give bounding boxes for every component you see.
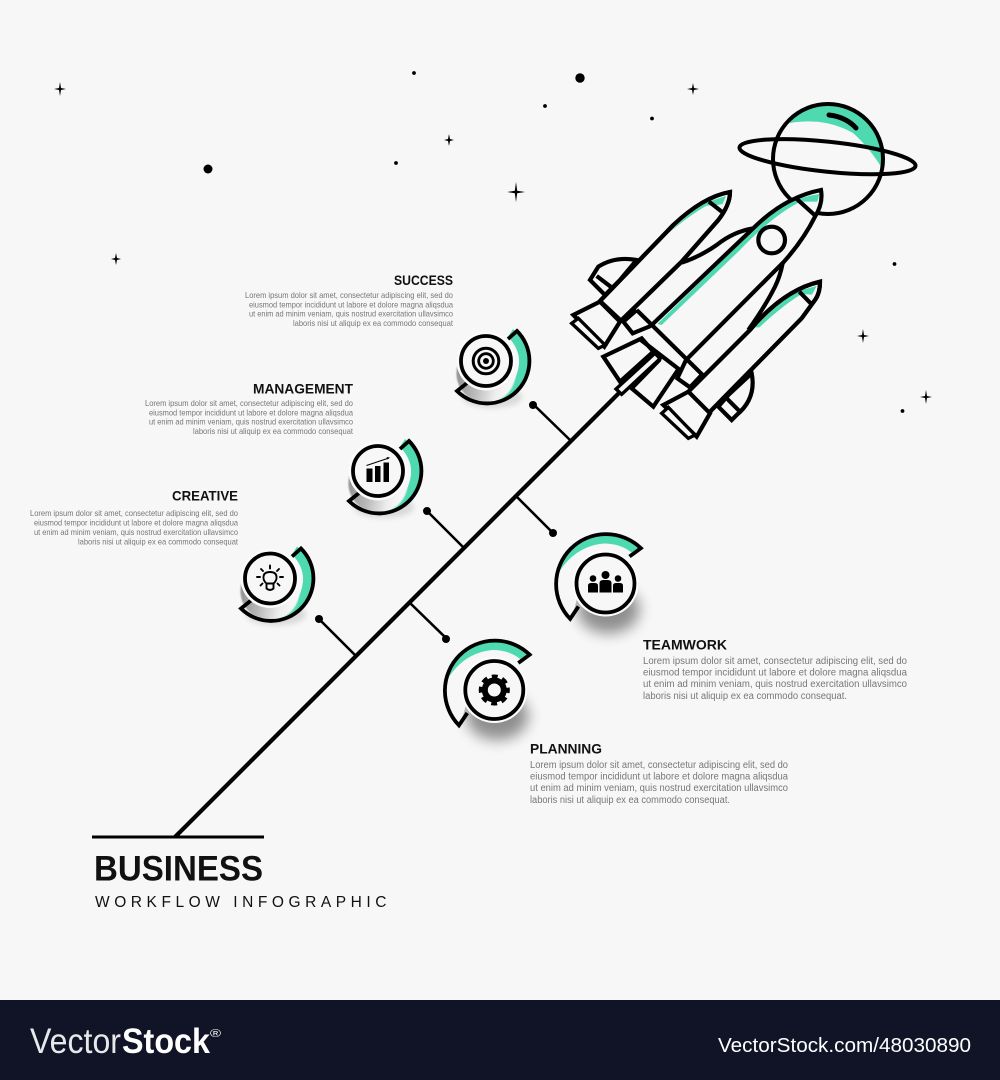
- title: BUSINESS: [94, 850, 263, 888]
- icon: target: [473, 348, 499, 374]
- workflow timeline with branches: [92, 392, 620, 837]
- text block: success: laboris nisi ut aliquip ex ea commodo consequat: [293, 318, 454, 328]
- text block: teamwork: [643, 636, 907, 702]
- icon: light bulb: [257, 566, 283, 590]
- icon: people: [588, 571, 623, 592]
- badge: creative bulb: [240, 546, 313, 626]
- text block: success: eiusmod tempor incididunt ut labore et dolore magna aliqsdua: [249, 299, 453, 309]
- text block: creative: eiusmod tempor incididunt ut labore et dolore magna aliqsdua: [34, 518, 238, 528]
- footer logo: ®: [210, 1028, 221, 1040]
- central rocket body: [603, 190, 822, 407]
- badge: teamwork people: [556, 534, 641, 634]
- title: [94, 850, 386, 911]
- text block: planning: [530, 740, 788, 806]
- footer logo: [30, 1022, 221, 1061]
- badge: management chart: [348, 439, 421, 518]
- text block: teamwork: laboris nisi ut aliquip ex ea commodo consequat.: [643, 691, 847, 702]
- badge: planning gear: [445, 641, 530, 740]
- starfield: [54, 71, 932, 413]
- right booster: [662, 263, 820, 438]
- text block: success: ut enim ad minim veniam, quis nostrud exercitation ullavsimco: [249, 309, 453, 319]
- text block: planning: Lorem ipsum dolor sit amet, consectetur adipiscing elit, sed do: [530, 760, 788, 771]
- icon: bar chart: [366, 457, 390, 482]
- text block: teamwork: ut enim ad minim veniam, quis nostrud exercitation ullavsimco: [643, 679, 907, 690]
- text block: management: ut enim ad minim veniam, quis nostrud exercitation ullavsimco: [149, 417, 353, 427]
- footer logo: Vector: [30, 1022, 121, 1061]
- text block: creative: CREATIVE: [172, 488, 238, 504]
- text block: planning: PLANNING: [530, 740, 602, 756]
- title: WORKFLOW INFOGRAPHIC: [95, 894, 386, 911]
- text block: success: [245, 272, 454, 328]
- footer image id: VectorStock.com/48030890: [718, 1035, 971, 1057]
- icon: rocket with boosters: [572, 190, 822, 438]
- footer bar: [0, 1000, 1000, 1080]
- text block: planning: eiusmod tempor incididunt ut labore et dolore magna aliqsdua: [530, 772, 788, 782]
- text block: teamwork: eiusmod tempor incididunt ut labore et dolore magna aliqsdua: [643, 668, 907, 678]
- text block: success: Lorem ipsum dolor sit amet, consectetur adipiscing elit, sed do: [245, 290, 453, 300]
- text block: creative: laboris nisi ut aliquip ex ea commodo consequat: [78, 536, 239, 546]
- text block: management: eiusmod tempor incididunt ut labore et dolore magna aliqsdua: [149, 407, 353, 417]
- icon: gear: [481, 677, 508, 703]
- text block: success: SUCCESS: [394, 272, 453, 288]
- text block: teamwork: Lorem ipsum dolor sit amet, consectetur adipiscing elit, sed do: [643, 656, 907, 667]
- text block: planning: ut enim ad minim veniam, quis nostrud exercitation ullavsimco: [530, 783, 788, 794]
- text block: creative: [30, 488, 239, 546]
- text block: creative: ut enim ad minim veniam, quis nostrud exercitation ullavsimco: [34, 527, 238, 537]
- text block: planning: laboris nisi ut aliquip ex ea commodo consequat.: [530, 795, 730, 806]
- text block: management: MANAGEMENT: [253, 380, 353, 396]
- text block: management: [145, 380, 354, 436]
- badge: success target: [456, 329, 529, 408]
- icon: ringed planet: [738, 104, 917, 214]
- left booster: [572, 192, 753, 348]
- footer logo: Stock: [122, 1022, 210, 1061]
- text block: teamwork: TEAMWORK: [643, 636, 727, 652]
- text block: management: Lorem ipsum dolor sit amet, consectetur adipiscing elit, sed do: [145, 398, 353, 408]
- text block: management: laboris nisi ut aliquip ex ea commodo consequat: [193, 426, 354, 436]
- text block: creative: Lorem ipsum dolor sit amet, consectetur adipiscing elit, sed do: [30, 508, 238, 518]
